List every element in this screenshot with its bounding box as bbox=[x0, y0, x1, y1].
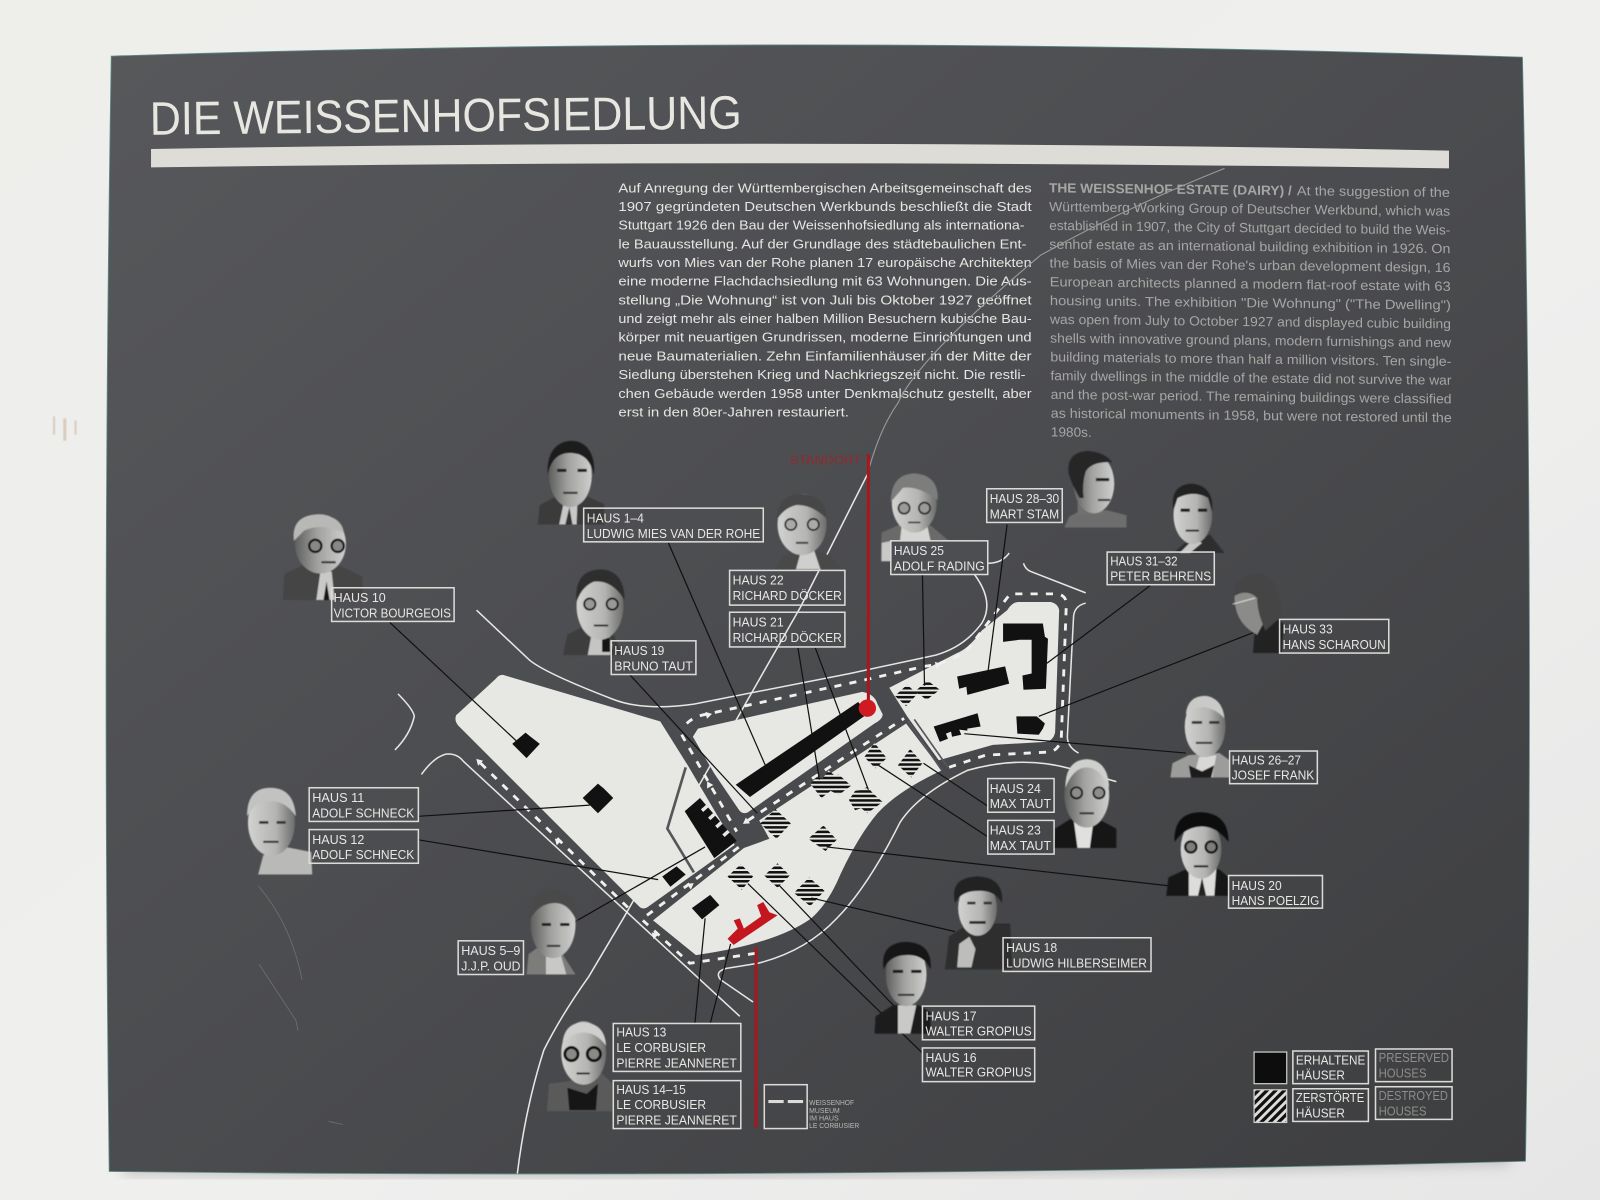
label: Haus 23 bbox=[988, 820, 1054, 854]
thin road inside west block bbox=[667, 767, 694, 872]
German intro text: chen Gebäude werden 1958 unter Denkmalschutz gestellt, aber bbox=[618, 386, 1032, 401]
legend: destroyed German: HÄUSER bbox=[1296, 1105, 1345, 1120]
label: Haus 5-9: HAUS 5–9 bbox=[461, 943, 520, 958]
house 13 bbox=[692, 895, 719, 919]
label: Haus 13 bbox=[613, 1023, 741, 1071]
label: Haus 25 bbox=[891, 541, 988, 574]
houses 28-30 bbox=[957, 666, 1009, 695]
block: north-east bbox=[889, 602, 1059, 760]
portrait: Walter Gropius bbox=[874, 942, 931, 1034]
legend: destroyed German: ZERSTÖRTE bbox=[1296, 1090, 1364, 1105]
museum logo and caption bbox=[764, 1085, 859, 1130]
museum logo and caption: LE CORBUSIER bbox=[809, 1122, 859, 1130]
leader lines bbox=[390, 524, 1253, 1053]
legend: preserved German: HÄUSER bbox=[1296, 1068, 1345, 1083]
dashed road centre lines bbox=[481, 594, 1066, 963]
museum logo and caption: WEISSENHOF bbox=[809, 1099, 855, 1107]
label: Haus 18: HAUS 18 bbox=[1006, 940, 1057, 955]
title: DIE WEISSENHOFSIEDLUNG bbox=[150, 86, 742, 145]
red standort marker bbox=[790, 452, 876, 717]
English intro text: established in 1907, the City of Stuttgart decided to build the Weis- bbox=[1049, 218, 1450, 238]
board shadow bbox=[122, 1153, 1510, 1178]
destroyed houses (hatched) bbox=[728, 681, 940, 906]
portrait: Hans Scharoun bbox=[1233, 573, 1284, 653]
block: west bbox=[455, 675, 735, 908]
house 1-4 bbox=[736, 702, 868, 797]
label: Haus 10 bbox=[332, 588, 454, 621]
German intro text: eine moderne Flachdachsiedlung mit 63 Wohnungen. Die Aus- bbox=[618, 274, 1032, 289]
label: Haus 21 bbox=[730, 612, 845, 647]
English intro text: was open from July to October 1927 and displayed cubic building bbox=[1049, 312, 1451, 331]
label: Haus 28-30 bbox=[987, 489, 1062, 522]
faint scratches bbox=[258, 886, 343, 1124]
wall stain bbox=[53, 416, 77, 441]
German intro text: Stuttgart 1926 den Bau der Weissenhofsiedlung als internationa- bbox=[618, 218, 1024, 233]
label: Haus 1-4: HAUS 1–4 bbox=[587, 510, 644, 525]
German intro text: wurfs von Mies van der Rohe planen 17 europäische Architekten bbox=[617, 255, 1032, 270]
label: Haus 33 bbox=[1280, 619, 1389, 653]
label: Haus 12: HAUS 12 bbox=[312, 832, 364, 847]
house 12 bbox=[662, 866, 686, 887]
English intro text: as historical monuments in 1958, but were not restored until the bbox=[1051, 406, 1452, 425]
label: Haus 28-30: HAUS 28–30 bbox=[990, 491, 1059, 506]
legend: preserved swatch bbox=[1254, 1052, 1287, 1084]
English intro text: European architects planned a modern flat-roof estate with 63 bbox=[1050, 274, 1451, 294]
label: Haus 24: HAUS 24 bbox=[990, 781, 1041, 796]
legend: preserved English bbox=[1376, 1049, 1452, 1082]
label: Haus 14-15: LE CORBUSIER bbox=[616, 1097, 706, 1112]
museum logo and caption: IM HAUS bbox=[809, 1114, 839, 1122]
English intro text: THE WEISSENHOF ESTATE (DAIRY) / bbox=[1049, 180, 1292, 198]
label: Haus 22: HAUS 22 bbox=[733, 573, 784, 588]
label: Haus 25: HAUS 25 bbox=[894, 543, 944, 558]
museum logo and caption: MUSEUM bbox=[809, 1107, 840, 1115]
label: Haus 21: RICHARD DÖCKER bbox=[733, 630, 842, 645]
English intro text: At the suggestion of the bbox=[1297, 183, 1450, 200]
label: Haus 23: HAUS 23 bbox=[990, 823, 1041, 838]
label: Haus 21: HAUS 21 bbox=[733, 615, 784, 630]
label: Haus 10: HAUS 10 bbox=[334, 590, 386, 605]
portrait: Adolf Schneck bbox=[247, 788, 312, 874]
white land blocks bbox=[455, 602, 1059, 955]
label: Haus 1-4 bbox=[584, 508, 763, 542]
label: Haus 20: HAUS 20 bbox=[1232, 878, 1282, 893]
house 11 bbox=[583, 784, 613, 813]
houses 26-27 bbox=[934, 713, 981, 742]
English intro text: the basis of Mies van der Rohe's urban development design, 16 bbox=[1049, 255, 1451, 275]
German intro text bbox=[617, 180, 1032, 419]
legend: destroyed swatch bbox=[1254, 1090, 1287, 1122]
portrait: Max Taut bbox=[1054, 759, 1116, 848]
red standort marker: STANDORT bbox=[790, 452, 861, 467]
portrait: Richard Döcker bbox=[776, 494, 843, 569]
label: Haus 10: VICTOR BOURGEOIS bbox=[334, 605, 451, 620]
block: south bbox=[653, 723, 942, 955]
label: Haus 17 bbox=[922, 1006, 1035, 1040]
German intro text: und zeigt mehr als einer halben Million Besuchern kubische Bau- bbox=[618, 311, 1032, 326]
legend: preserved English: HOUSES bbox=[1379, 1066, 1427, 1081]
English intro text: housing units. The exhibition "Die Wohnung" ("The Dwelling") bbox=[1050, 293, 1451, 313]
label: Haus 20 bbox=[1229, 876, 1322, 908]
portrait: Victor Bourgeois bbox=[283, 514, 363, 600]
label: Haus 26-27: HAUS 26–27 bbox=[1232, 752, 1301, 767]
label: Haus 25: ADOLF RADING bbox=[894, 558, 985, 573]
portrait: J.J.P. Oud bbox=[527, 890, 578, 974]
label: Haus 19: HAUS 19 bbox=[614, 643, 664, 658]
English intro text: building materials to more than half a million visitors. Ten single- bbox=[1050, 349, 1451, 369]
red Le Corbusier museum building bbox=[728, 902, 778, 945]
label: Haus 26-27 bbox=[1230, 751, 1317, 784]
portrait: Mart Stam bbox=[1064, 451, 1127, 528]
label: Haus 12: ADOLF SCHNECK bbox=[312, 847, 414, 862]
label: Haus 22: RICHARD DÖCKER bbox=[733, 588, 842, 603]
label: Haus 31-32: PETER BEHRENS bbox=[1110, 569, 1211, 584]
label: Haus 22 bbox=[730, 570, 845, 605]
German intro text: neue Baumaterialien. Zehn Einfamilienhäuser in der Mitte der bbox=[618, 348, 1032, 363]
label: Haus 12 bbox=[309, 830, 418, 863]
German intro text: le Bauausstellung. Auf der Grundlage des städtebaulichen Ent- bbox=[618, 236, 1027, 251]
English intro text: 1980s. bbox=[1051, 424, 1092, 440]
block: centre with Mies building bbox=[693, 692, 883, 813]
label: Haus 17: HAUS 17 bbox=[926, 1008, 977, 1023]
label: Haus 14-15: HAUS 14–15 bbox=[616, 1082, 686, 1097]
legend: preserved German bbox=[1293, 1051, 1368, 1084]
portrait: Bruno Taut bbox=[563, 569, 624, 655]
house 33 bbox=[1016, 716, 1045, 735]
English intro text: Württemberg Working Group of Deutscher Werkbund, which was bbox=[1049, 199, 1451, 219]
label: Haus 1-4: LUDWIG MIES VAN DER ROHE bbox=[587, 526, 760, 541]
red museum pointer bbox=[755, 947, 758, 1128]
German intro text: Auf Anregung der Württembergischen Arbeitsgemeinschaft des bbox=[618, 180, 1032, 195]
houses 31-32 bbox=[1003, 623, 1048, 690]
label: Haus 16 bbox=[922, 1048, 1035, 1082]
portrait: Hans Poelzig bbox=[1166, 812, 1229, 896]
houses 5-9 bbox=[685, 798, 737, 858]
portrait: Peter Behrens bbox=[1173, 484, 1224, 553]
German intro text: stellung „Die Wohnung“ ist von Juli bis Oktober 1927 geöffnet bbox=[618, 292, 1032, 307]
legend: preserved English: PRESERVED bbox=[1379, 1050, 1449, 1065]
label: Haus 19 bbox=[611, 641, 696, 674]
label: Haus 33: HANS SCHAROUN bbox=[1283, 637, 1386, 652]
English intro text: shells with innovative ground plans, modern furnishings and new bbox=[1050, 331, 1452, 350]
site map bbox=[390, 168, 1253, 1173]
label: Haus 18 bbox=[1003, 938, 1151, 971]
German intro text: körper mit neuartigen Grundrissen, moderne Einrichtungen und bbox=[618, 330, 1032, 345]
English intro text: senhof estate as an international building exhibition in 1926. On bbox=[1049, 237, 1450, 256]
label: Haus 16: HAUS 16 bbox=[926, 1050, 977, 1065]
label: Haus 18: LUDWIG HILBERSEIMER bbox=[1006, 955, 1147, 970]
thin road outlines bbox=[395, 168, 1224, 1173]
label: Haus 11: HAUS 11 bbox=[312, 790, 364, 805]
English intro text: and the post-war period. The remaining buildings were classified bbox=[1051, 387, 1452, 406]
portrait: Adolf Rading bbox=[881, 473, 949, 561]
label: Haus 28-30: MART STAM bbox=[990, 506, 1059, 521]
title bar bbox=[151, 144, 1449, 168]
legend: destroyed English: HOUSES bbox=[1379, 1103, 1427, 1118]
house 10 bbox=[512, 733, 540, 758]
label: Haus 20: HANS POELZIG bbox=[1232, 893, 1319, 908]
label: Haus 16: WALTER GROPIUS bbox=[926, 1065, 1032, 1080]
label: Haus 26-27: JOSEF FRANK bbox=[1232, 768, 1314, 783]
label: Haus 23: MAX TAUT bbox=[990, 838, 1051, 853]
label: Haus 5-9: J.J.P. OUD bbox=[461, 958, 520, 973]
preserved houses bbox=[512, 623, 1048, 919]
label: Haus 14-15: PIERRE JEANNERET bbox=[616, 1112, 737, 1127]
label: Haus 14-15 bbox=[613, 1081, 741, 1129]
legend: destroyed English bbox=[1376, 1087, 1452, 1119]
legend: preserved German: ERHALTENE bbox=[1296, 1052, 1365, 1067]
label: Haus 13: LE CORBUSIER bbox=[616, 1040, 706, 1055]
label: Haus 24: MAX TAUT bbox=[990, 796, 1051, 811]
English intro text bbox=[1048, 180, 1453, 444]
portrait: Mies van der Rohe bbox=[538, 441, 604, 524]
label: Haus 17: WALTER GROPIUS bbox=[926, 1024, 1032, 1039]
label: Haus 33: HAUS 33 bbox=[1283, 622, 1333, 637]
label: Haus 31-32: HAUS 31–32 bbox=[1110, 553, 1178, 568]
label: Haus 11 bbox=[309, 788, 418, 821]
German intro text: erst in den 80er-Jahren restauriert. bbox=[618, 404, 849, 419]
portrait: Ludwig Hilberseimer bbox=[945, 877, 1012, 969]
label: Haus 31-32 bbox=[1107, 552, 1214, 585]
legend bbox=[1254, 1049, 1452, 1122]
legend: destroyed German bbox=[1293, 1089, 1368, 1121]
road direction arrows bbox=[474, 660, 943, 939]
label: Haus 5-9 bbox=[458, 941, 523, 974]
label: Haus 19: BRUNO TAUT bbox=[614, 658, 693, 673]
German intro text: Siedlung überstehen Krieg und Nachkriegszeit nicht. Die restli- bbox=[618, 367, 1026, 382]
label: Haus 13: PIERRE JEANNERET bbox=[616, 1055, 737, 1070]
portrait: Josef Frank bbox=[1170, 696, 1230, 778]
German intro text: 1907 gegründeten Deutschen Werkbunds beschließt die Stadt bbox=[618, 199, 1032, 214]
label: Haus 11: ADOLF SCHNECK bbox=[312, 805, 414, 820]
label: Haus 24 bbox=[988, 779, 1054, 812]
portrait: Le Corbusier bbox=[547, 1021, 612, 1111]
label: Haus 13: HAUS 13 bbox=[616, 1025, 666, 1040]
English intro text: family dwellings in the middle of the estate did not survive the war bbox=[1050, 368, 1452, 388]
legend: destroyed English: DESTROYED bbox=[1379, 1088, 1448, 1103]
